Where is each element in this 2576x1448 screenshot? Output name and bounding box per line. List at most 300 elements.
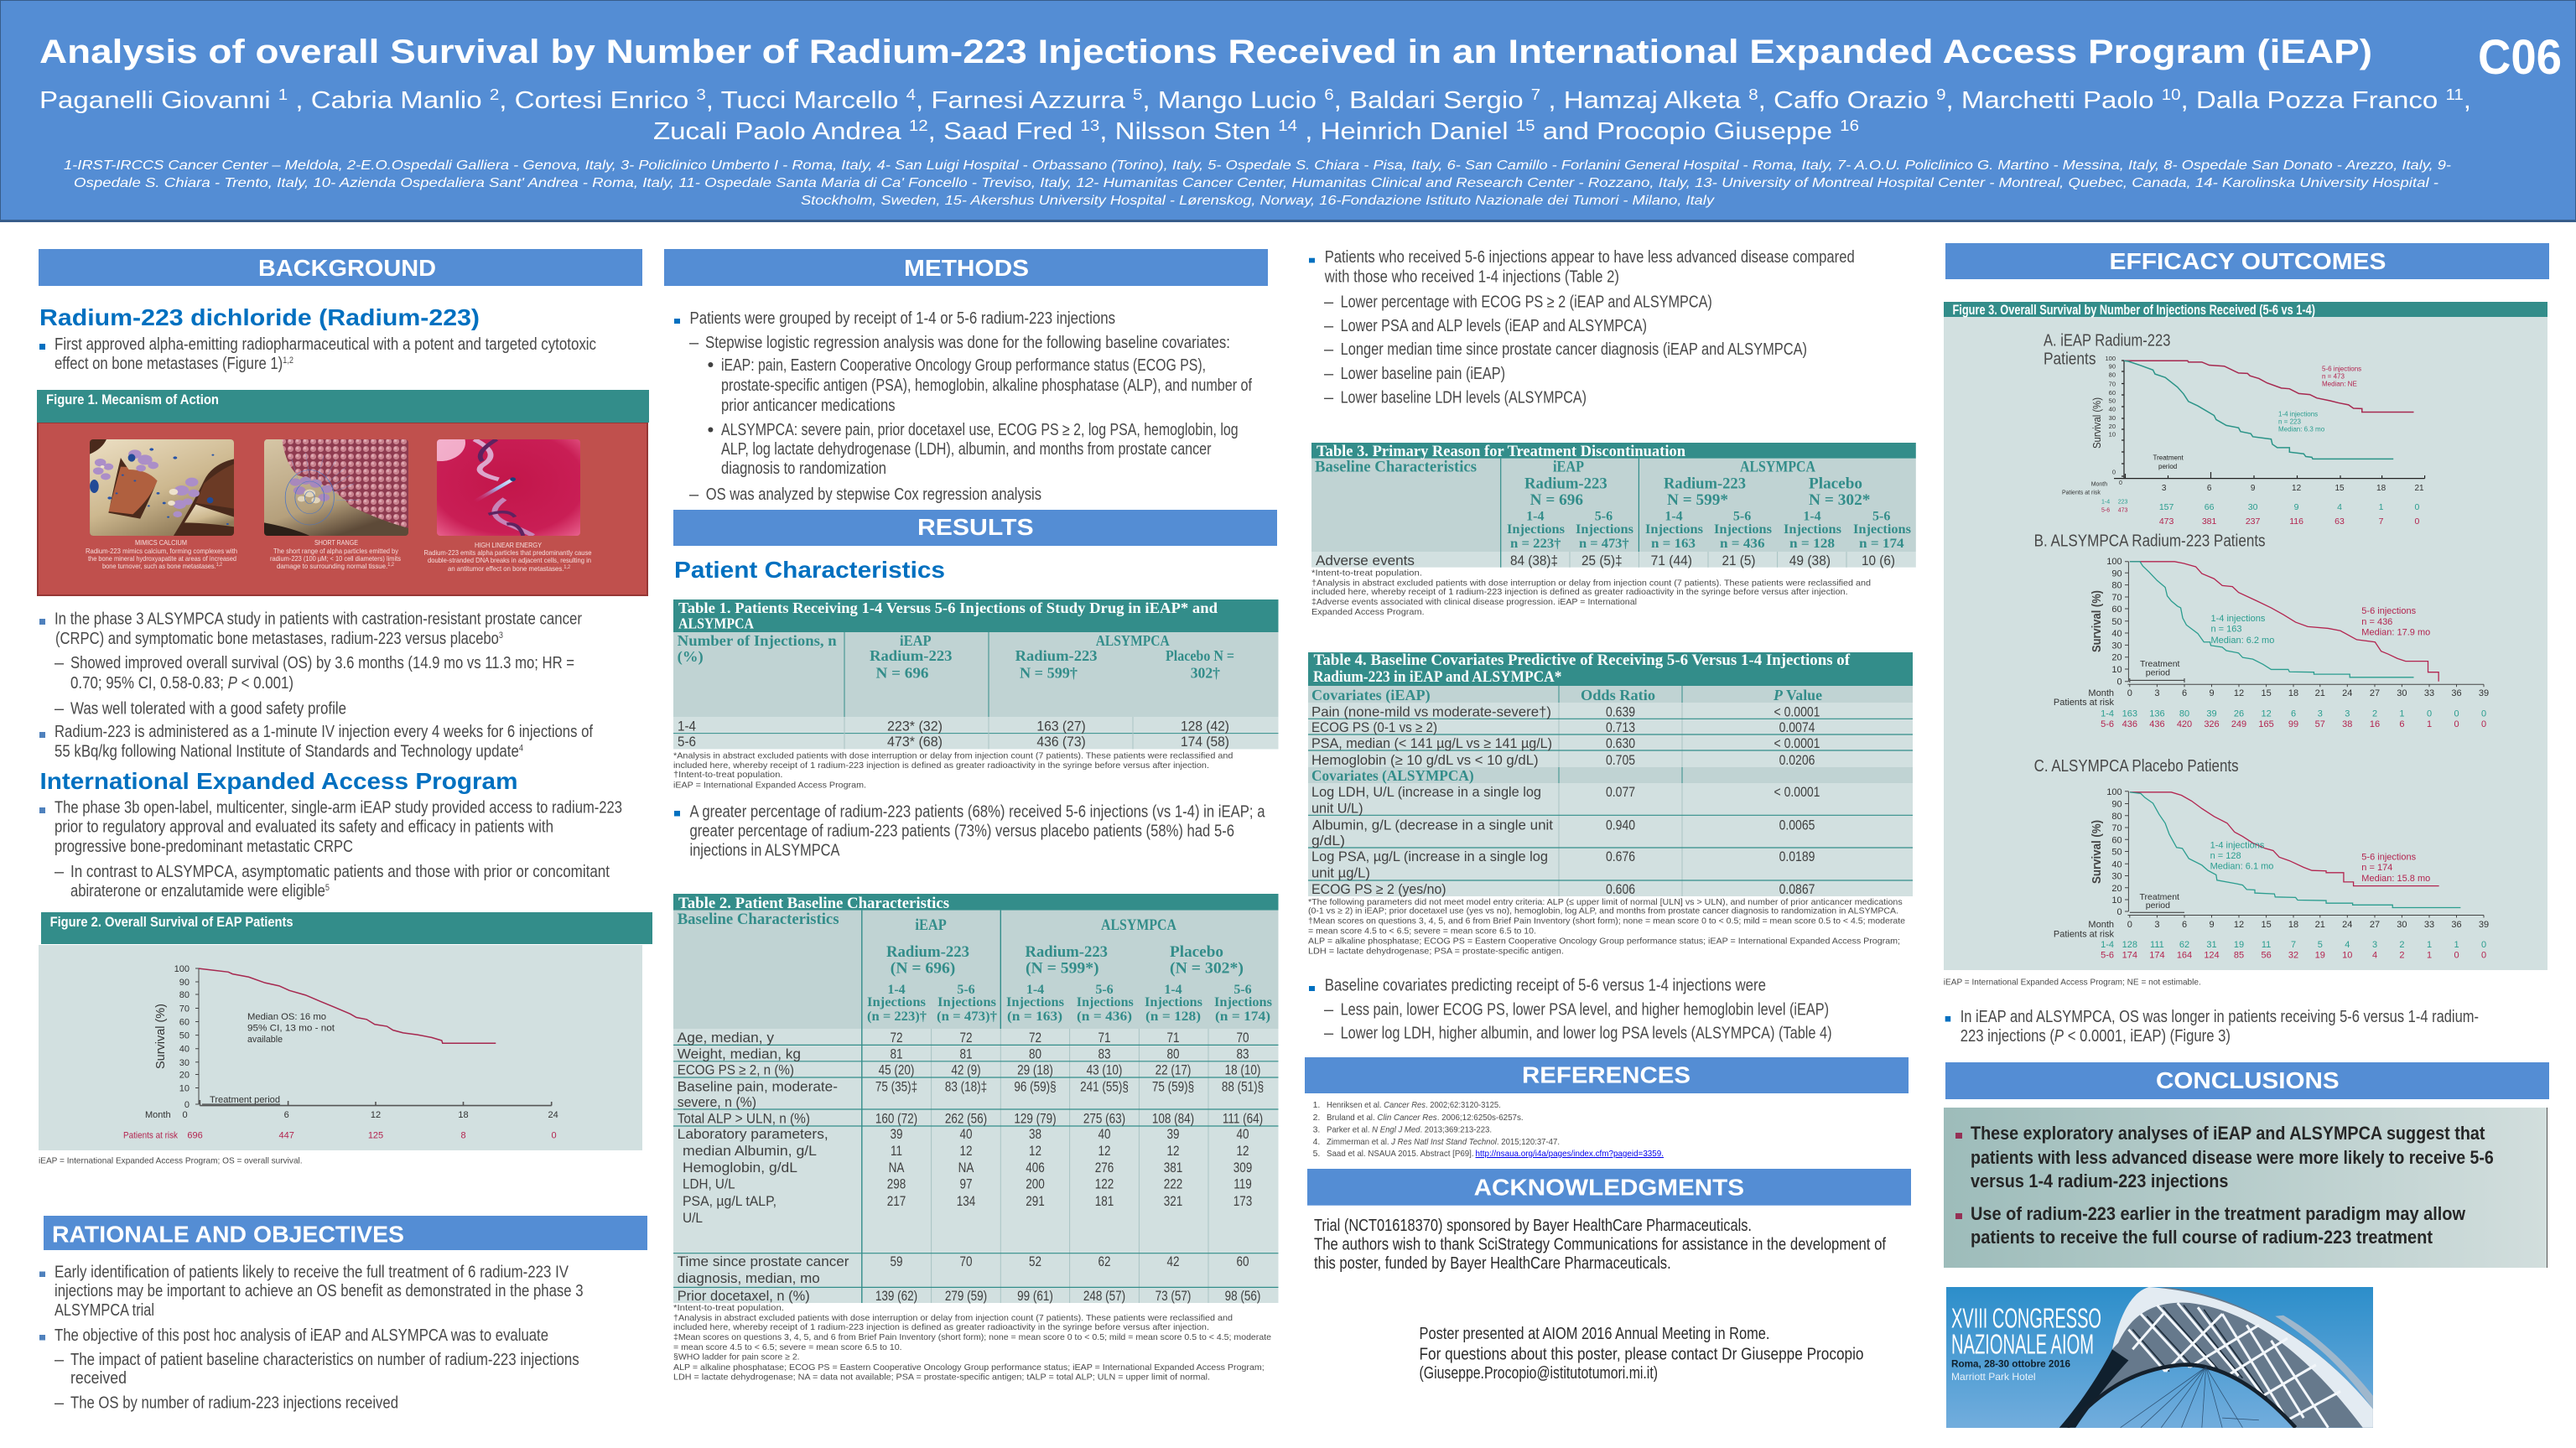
chart B: ALSYMPCA radium-223 patients: Patients at risk [2054,698,2114,708]
table 2: NA [889,1160,905,1176]
table 2: iEAP [915,916,947,934]
table 1: 128 (42) [1181,719,1229,734]
chart B: ALSYMPCA radium-223 patients: 6 [2399,719,2404,729]
subheading: patient characteristics: Patient Characteristics [674,557,945,583]
figure 3: overall survival by number of injections [1944,302,2547,970]
text block: less advanced disease: with those who received 1-4 injections (Table 2) [1324,268,1619,287]
caption: high linear energy: double-stranded DNA breaks in adjacent cells, resulting in [428,556,591,564]
chart B: ALSYMPCA radium-223 patients: 21 [2315,688,2325,698]
header band [0,0,2576,222]
text block: baseline covariates [1309,977,1832,1042]
text block: less advanced disease [1309,248,1855,407]
table 2: (N = 599*) [1026,960,1099,978]
table 2: LDH, U/L [683,1177,735,1192]
table 2: ALSYMPCA [1101,916,1176,934]
table 3: n = 223† [1510,537,1561,551]
heading: efficacy outcomes: EFFICACY OUTCOMES [2110,248,2386,274]
chart B: ALSYMPCA radium-223 patients: 80 [2179,708,2189,719]
table 2 footnotes: ALP = alkaline phosphatase; ECOG PS = Eastern Cooperative Oncology Group performance status; iEAP = International Expanded Access Program; [673,1362,1265,1373]
chart C: ALSYMPCA placebo patients: 10 [2342,951,2352,961]
chart: overall survival curve: 95% CI, 13 mo - not [247,1024,335,1034]
table 1: 436 (73) [1036,734,1086,750]
table 2: diagnosis, median, mo [678,1271,820,1286]
table 1: 473* (68) [887,734,943,750]
chart C: ALSYMPCA placebo patients: 1-4 [2101,940,2114,950]
chart A: iEAP radium-223 patients: 70 [2109,381,2116,387]
chart A: iEAP radium-223 patients: 1 [2379,502,2384,512]
chart B: ALSYMPCA radium-223 patients: 16 [2370,719,2380,729]
chart A: iEAP radium-223 patients: Patients [2044,350,2096,368]
chart B: ALSYMPCA radium-223 patients: 70 [2111,593,2122,603]
table 2: Table 2. Patient Baseline Characteristics [678,895,949,912]
chart A: iEAP radium-223 patients: 15 [2334,484,2345,493]
table 2: (n = 436) [1077,1009,1132,1024]
table 2: 59 [890,1254,903,1269]
image: bone with radium-223 [90,439,234,536]
subheading: iEAP: International Expanded Access Program [40,768,518,794]
table 2: 71 [1166,1030,1180,1046]
chart A: iEAP radium-223 patients: 21 [2414,484,2424,493]
chart A: iEAP radium-223 patients: Patients at risk [2062,490,2101,496]
table 1: Radium-223 [870,647,953,664]
caption: short range: SHORT RANGE [314,538,358,547]
chart: overall survival curve: Month [145,1110,171,1120]
text block: ALSYMPCA results: Was well tolerated with a good safety profile [70,700,346,719]
banner: AIOM congress [1946,1287,2373,1428]
text block: baseline covariates: Less pain, lower ECOG PS, lower PSA level, and higher hemoglobin level (iEAP) [1341,1001,1829,1020]
table 2: 40 [959,1127,973,1142]
heading: rationale [44,1216,647,1250]
table 2: median Albumin, g/L [683,1144,817,1159]
authors: 15 [1516,117,1535,134]
table 2: 38 [1029,1127,1041,1142]
table 1 [673,599,1278,750]
chart A: iEAP radium-223 patients: 80 [2109,371,2116,379]
chart B: ALSYMPCA radium-223 patients: 15 [2261,688,2272,698]
panel: efficacy outcomes [1944,243,2549,1046]
chart A: iEAP radium-223 patients: 5-6 [2101,508,2110,514]
chart A: iEAP radium-223 patients: 237 [2246,516,2261,527]
text block: OS longer: 223 injections (P < 0.0001, iEAP) (Figure 3) [1961,1027,2231,1046]
table 2: 22 (17) [1156,1062,1191,1078]
text block: ALSYMPCA results: 4 [519,743,523,753]
chart C: ALSYMPCA placebo patients: 9 [2209,920,2215,930]
authors: 1 [278,86,288,103]
table 1: Placebo N = [1166,647,1234,664]
chart A: iEAP radium-223 patients: 473 [2118,508,2127,514]
chart B: ALSYMPCA radium-223 patients: 38 [2342,719,2352,729]
table 2: NA [958,1160,974,1176]
table 2: 83 [1236,1046,1249,1062]
chart B: ALSYMPCA radium-223 patients: 6 [2291,708,2296,719]
text block: acknowledgments: this poster, funded by Bayer HealthCare Pharmaceuticals. [1314,1254,1671,1273]
chart B: ALSYMPCA radium-223 patients: 39 [2479,688,2489,698]
chart A: iEAP radium-223 patients: 381 [2202,516,2217,527]
text block: radium-223 description: 1,2 [283,356,293,366]
table 2: 80 [1029,1046,1041,1062]
table 2: 1-4 [1026,983,1044,997]
caption: mimics calcium: bone turnover, such as bone metastases. [102,562,232,570]
text block: rationale: ALSYMPCA trial [55,1301,154,1320]
chart B: ALSYMPCA radium-223 patients: Month [2088,688,2114,698]
chart C: ALSYMPCA placebo patients: 19 [2234,940,2244,950]
chart B: ALSYMPCA radium-223 patients: 18 [2288,688,2298,698]
text block: methods [674,309,1252,504]
affiliations: Stockholm, Sweden, 15- Akershus University Hospital - Lørenskog, Norway, 16-Fondazione Istituto Nazionale dei Tumori - Milano, Italy [801,194,1715,208]
chart B: ALSYMPCA radium-223 patients: 80 [2111,581,2122,591]
chart C: ALSYMPCA placebo patients: Survival (%) [2090,820,2104,884]
image: high linear energy [437,439,580,536]
reference list: Bruland et al. Clin Cancer Res. 2006;12:6250s-6257s. [1327,1113,1524,1123]
heading: rationale: RATIONALE AND OBJECTIVES [52,1222,404,1248]
chart B: ALSYMPCA radium-223 patients: 12 [2234,688,2244,698]
caption: mimics calcium: 1,2 [216,563,223,568]
chart C: ALSYMPCA placebo patients: 33 [2424,920,2434,930]
caption: high linear energy: 1,2 [564,565,571,570]
chart B: ALSYMPCA radium-223 patients: 0 [2427,708,2432,719]
chart A: iEAP radium-223 patients: 3 [2162,484,2167,493]
table 2: 12 [1029,1144,1041,1159]
table 2: 42 [1166,1254,1180,1269]
chart B: ALSYMPCA radium-223 patients: 30 [2397,688,2407,698]
chart B: ALSYMPCA radium-223 patients: 1 [2399,708,2404,719]
table 4: Covariates (iEAP) [1311,687,1431,704]
authors: 2 [490,86,499,103]
chart B: ALSYMPCA radium-223 patients: 1-4 [2101,708,2114,719]
chart: overall survival curve: 30 [179,1058,190,1068]
table 2: 29 (18) [1017,1062,1053,1078]
text block: ALSYMPCA results [39,610,593,761]
conclusions box: These exploratory analyses of iEAP and ALSYMPCA suggest that [1971,1123,2485,1144]
conclusions box: versus 1-4 radium-223 injections [1971,1170,2228,1191]
heading: results: RESULTS [917,514,1034,540]
table 1 footnotes: *Analysis in abstract excluded patients with dose interruption or delay from injection count (7 patients). These patients were reclassified and [673,751,1233,761]
chart C: ALSYMPCA placebo patients: 39 [2479,920,2489,930]
chart A: iEAP radium-223 patients: n = 223 [2278,418,2301,425]
text block: radium-223 description: First approved alpha-emitting radiopharmaceutical with a potent and targeted cytotoxic [55,335,596,354]
table 3: Injections [1714,522,1772,537]
table 2: 298 [887,1176,906,1192]
table 3: Radium-223 [1524,475,1607,492]
chart: overall survival curve: 18 [458,1110,469,1120]
chart C: ALSYMPCA placebo patients: Median: 15.8 mo [2361,874,2430,884]
table 1 footnotes: included here, whereby receipt of 1 radium-223 injection is defined as greater radioactivity in the syringe before versus after injection. [673,760,1209,771]
chart B: ALSYMPCA radium-223 patients: 163 [2122,708,2137,719]
text block: methods: – [689,485,699,504]
table 3: n = 436 [1720,537,1764,551]
table 4: 0.0867 [1779,882,1815,897]
chart C: ALSYMPCA placebo patients: 12 [2234,920,2244,930]
chart C: ALSYMPCA placebo patients: Month [2088,920,2114,930]
text block: ALSYMPCA results: – [55,700,65,719]
chart A: iEAP radium-223 patients: 60 [2109,389,2116,397]
chart A: iEAP radium-223 patients: 116 [2289,516,2303,527]
authors: , Tucci Marcello [706,87,906,114]
text block: baseline covariates: – [1324,1024,1334,1042]
chart A: iEAP radium-223 patients: 223 [2118,499,2127,505]
chart: overall survival curve: 80 [179,990,190,1000]
table 2: 72 [1029,1030,1041,1046]
table 1: ALSYMPCA [678,615,754,632]
table 2: Baseline pain, moderate- [678,1079,838,1094]
table 2: 111 (64) [1223,1111,1263,1127]
table 3: Placebo [1809,475,1862,492]
table 4: < 0.0001 [1774,736,1820,751]
table 3 footnotes: *Intent-to-treat population. [1311,568,1422,579]
text block: greater percentage: greater percentage of radium-223 patients (73%) versus placebo patients (58%) had 5-6 [689,823,1234,841]
table 4: 0.0065 [1779,817,1815,833]
table 1: 223* (32) [887,719,943,734]
table 2 footnotes [673,1303,1271,1383]
chart C: ALSYMPCA placebo patients: 62 [2179,940,2189,950]
chart B: ALSYMPCA radium-223 patients: 57 [2315,719,2325,729]
table 4: Odds Ratio [1581,687,1655,703]
table 2: 42 (9) [951,1062,981,1078]
chart A: iEAP radium-223 patients: period [2158,463,2177,470]
table 3: Table 3. Primary Reason for Treatment Discontinuation [1317,443,1685,460]
table 4: 0.630 [1606,736,1635,751]
text block: iEAP description: 5 [325,883,330,893]
table 2: 99 (61) [1017,1289,1053,1304]
text block: acknowledgments: The authors wish to thank SciStrategy Communications for assistance in the development of [1314,1236,1886,1254]
text block: OS longer: In iEAP and ALSYMPCA, OS was longer in patients receiving 5-6 versus 1-4 radium- [1961,1008,2479,1026]
table 3: ALSYMPCA [1740,459,1815,476]
conclusions box: patients with less advanced disease were more likely to receive 5-6 [1971,1147,2494,1168]
table 3: 1-4 [1526,510,1544,524]
chart: overall survival curve: 696 [187,1131,203,1141]
table 4 footnotes: †Mean scores on questions 3, 4, 5, and 6 from Brief Pain Inventory (short form); none = mean score 0 to < 0.5; mild = mean score 0.5 to < 4.5; moderate [1308,916,1905,926]
chart: overall survival curve: 8 [460,1131,466,1141]
heading: conclusions [1945,1062,2549,1099]
chart B: ALSYMPCA radium-223 patients: 1-4 injections [2210,614,2266,624]
text block: iEAP description: In contrast to ALSYMPCA, asymptomatic patients and those with prior or concomitant [70,863,610,881]
table 2: 81 [959,1046,973,1062]
table 4 footnotes: LDH = lactate dehydrogenase; PSA = prostate-specific antigen. [1308,947,1564,957]
chart C: ALSYMPCA placebo patients: Median: 6.1 mo [2210,862,2273,872]
table 4: P Value [1773,687,1822,703]
chart C: ALSYMPCA placebo patients: 111 [2150,940,2164,950]
table 2: 80 [1166,1046,1180,1062]
table 2: (n = 473)† [937,1009,997,1024]
chart A: iEAP radium-223 patients [2044,332,2425,527]
affiliations: 1-IRST-IRCCS Cancer Center – Meldola, 2-E.O.Ospedali Galliera - Genova, Italy, 3- Policlinico Umberto I - Roma, Italy, 4- San Luigi Hospital - Orbassano (Torino), Italy, 5- Ospedale S. Chiara - Pisa, Italy, 6- San Camillo - Forlanini General Hospital - Roma, Italy, 7- A.O.U. Policlinico G. Martino - Messina, Italy, 8- Ospedale San Donato - Arezzo, Italy, 9- [64,158,2451,173]
reference list: Zimmerman et al. J Res Natl Inst Stand Technol. 2015;120:37-47. [1327,1137,1560,1147]
chart B: ALSYMPCA radium-223 patients: 99 [2288,719,2298,729]
chart B: ALSYMPCA radium-223 patients: 436 [2149,719,2165,729]
table 3: Radium-223 [1664,475,1746,492]
table 1: 302† [1191,665,1220,682]
table 4: 0.0189 [1779,849,1815,864]
table 4: < 0.0001 [1774,785,1820,800]
chart B: ALSYMPCA radium-223 patients: 100 [2106,557,2122,567]
table 3: N = 696 [1530,491,1583,509]
table 1: Radium-223 [1015,647,1098,664]
table 2: 70 [959,1254,973,1269]
chart C: ALSYMPCA placebo patients: 0 [2454,951,2459,961]
text block: methods: prior anticancer medications [721,397,896,415]
chart C: ALSYMPCA placebo patients: 70 [2111,823,2122,833]
chart A: iEAP radium-223 patients: 40 [2109,405,2116,413]
panel: background [37,249,652,1165]
table 2: 321 [1164,1194,1182,1209]
table 2: 62 [1098,1254,1111,1269]
chart C: ALSYMPCA placebo patients: 128 [2122,940,2137,950]
banner text [1951,1303,2101,1383]
text block: less advanced disease: Longer median time since prostate cancer diagnosis (iEAP and ALSYMPCA) [1341,340,1807,359]
chart: overall survival curve: 0 [182,1110,188,1120]
chart A: iEAP radium-223 patients: Month [2091,482,2107,488]
text block: methods: – [689,334,699,352]
caption: high linear energy: Radium-223 emits alpha particles that predominantly cause [424,548,592,557]
table 4: < 0.0001 [1774,704,1820,720]
authors: 9 [1936,86,1946,103]
chart C: ALSYMPCA placebo patients: 4 [2345,940,2350,950]
chart A: iEAP radium-223 patients: 90 [2109,363,2116,371]
caption: short range: damage to surrounding normal tissue. [277,562,397,570]
table 2: 75 (35)‡ [875,1079,917,1095]
heading: background [39,249,642,286]
text block: less advanced disease: – [1324,340,1334,359]
chart: overall survival curve: 12 [371,1110,381,1120]
chart B: ALSYMPCA radium-223 patients: 0 [2454,708,2459,719]
table 2: ECOG PS ≥ 2, n (%) [678,1063,794,1078]
table 4: g/dL) [1311,833,1345,849]
table 2: 75 (59)§ [1152,1079,1194,1095]
text block: baseline covariates: – [1324,1001,1334,1020]
reference list: Henriksen et al. Cancer Res. 2002;62:3120-3125. [1327,1100,1501,1110]
table 2: 72 [959,1030,973,1046]
heading: results [673,510,1277,546]
table 2: 1-4 [887,983,906,997]
table 4: 0.606 [1606,882,1635,897]
chart A: iEAP radium-223 patients: 7 [2379,516,2384,527]
table 4 [1308,651,1913,897]
text block: greater percentage [674,802,1265,860]
chart: overall survival curve: 0 [552,1131,557,1141]
table 2: Injections [937,995,996,1009]
table 2: 248 (57) [1083,1289,1125,1304]
text block: ALSYMPCA results: (CRPC) and symptomatic bone metastases, radium-223 versus placebo [55,630,589,648]
chart A: iEAP radium-223 patients: Median: 6.3 mo [2278,425,2325,433]
chart B: ALSYMPCA radium-223 patients: Median: 6.2 mo [2210,636,2274,646]
table 2 footnotes: = mean score 4.5 to < 6.5; severe = mean score 6.5 to 10. [673,1342,902,1352]
heading: references [1305,1057,1909,1093]
table 1: (%) [678,648,704,666]
table 4: Albumin, g/L (decrease in a single unit [1312,817,1553,833]
text block: less advanced disease: – [1324,365,1334,383]
table 3: 25 (5)‡ [1581,553,1623,568]
authors: 16 [1840,117,1859,134]
heading: acknowledgments: ACKNOWLEDGMENTS [1474,1175,1744,1201]
authors: 7 [1531,86,1540,103]
table 2: Injections [1077,995,1134,1009]
chart: overall survival curve: Survival (%) [153,1004,168,1069]
table 2: (N = 302*) [1170,960,1244,978]
text block: baseline covariates: Lower log LDH, higher albumin, and lower log PSA levels (ALSYMPCA) (Table 4) [1341,1024,1832,1042]
chart B: ALSYMPCA radium-223 patients: 39 [2206,708,2217,719]
table 2: 83 (18)‡ [945,1079,987,1095]
caption: short range [270,538,401,570]
banner text: Marriott Park Hotel [1951,1371,2036,1383]
table 4 footnotes [1308,897,1905,957]
figure 1: mechanism of action: Figure 1. Mecanism of Action [46,392,219,407]
chart A: iEAP radium-223 patients: 30 [2109,414,2116,422]
table 4: Radium-223 in iEAP and ALSYMPCA* [1313,668,1561,686]
table 4: 0.713 [1606,720,1635,735]
chart: overall survival curve: 24 [548,1110,558,1120]
chart: overall survival curve: Treatment period [210,1095,280,1105]
table 2: 70 [1236,1030,1249,1046]
table 2: Time since prostate cancer [678,1254,849,1269]
chart C: ALSYMPCA placebo patients: 36 [2451,920,2462,930]
chart C: ALSYMPCA placebo patients: 6 [2182,920,2187,930]
text block: iEAP description: progressive bone-predominant metastatic CRPC [55,838,353,856]
chart C: ALSYMPCA placebo patients: 85 [2234,951,2244,961]
authors: 13 [1080,117,1099,134]
chart C: ALSYMPCA placebo patients: 15 [2261,920,2272,930]
authors: , Saad Fred [928,118,1080,145]
table 3: n = 473† [1579,537,1629,551]
heading: methods [664,249,1268,286]
table 3 footnotes: †Analysis in abstract excluded patients with dose interruption or delay from injection count (7 patients). These patients were reclassified and [1311,579,1871,589]
table 2 footnotes: §WHO ladder for pain score ≥ 2. [673,1352,800,1362]
text block: radium-223 description: effect on bone metastases (Figure 1) [55,355,328,373]
authors: , Dalla Pozza Franco [2181,87,2446,114]
table 2: 5-6 [957,983,975,997]
text block: rationale [39,1263,584,1412]
footnote: iEAP = International Expanded Access Program; OS = overall survival. [39,1155,303,1165]
table 4: 0.705 [1606,753,1635,768]
text block: less advanced disease: – [1324,389,1334,407]
chart A: iEAP radium-223 patients: 12 [2292,484,2302,493]
chart C: ALSYMPCA placebo patients: 0 [2481,951,2486,961]
table 4: 0.940 [1606,817,1635,833]
table 2: 83 [1098,1046,1111,1062]
table 1 footnotes [673,751,1233,790]
caption: high linear energy: HIGH LINEAR ENERGY [475,541,542,549]
text block: ALSYMPCA results: 3 [499,631,503,641]
table 2: Laboratory parameters, [678,1127,828,1142]
table 1 footnotes: †Intent-to-treat population. [673,770,783,780]
table 4: Pain (none-mild vs moderate-severe†) [1311,704,1551,719]
chart A: iEAP radium-223 patients: 0 [2414,516,2419,527]
chart B: ALSYMPCA radium-223 patients: 50 [2111,617,2122,627]
text block: methods: prostate-specific antigen (PSA), hemoglobin, alkaline phosphatase (ALP), and number of [721,376,1252,395]
chart B: ALSYMPCA radium-223 patients: 1 [2427,719,2432,729]
chart A: iEAP radium-223 patients: A. iEAP Radium-223 [2044,332,2170,350]
table 2: 52 [1029,1254,1041,1269]
figure 2: overall survival of EAP patients: Figure 2. Overall Survival of EAP Patients [50,914,293,930]
chart A: iEAP radium-223 patients: 1-4 [2101,499,2110,505]
chart B: ALSYMPCA radium-223 patients: 27 [2370,688,2380,698]
heading: acknowledgments [1307,1169,1911,1206]
chart: overall survival curve: 60 [179,1018,190,1028]
table 3: Injections [1853,522,1911,537]
authors: , Heinrich Daniel [1297,118,1516,145]
text block: iEAP description: abiraterone or enzalutamide were eligible [70,882,377,900]
text block: less advanced disease: Lower baseline pain (iEAP) [1341,365,1505,383]
image: short range [264,439,408,536]
table 2: 12 [1098,1144,1111,1159]
caption: high linear energy [424,541,592,573]
table 2: 43 (10) [1087,1062,1122,1078]
text block: less advanced disease: Lower PSA and ALP levels (iEAP and ALSYMPCA) [1341,317,1647,335]
chart C: ALSYMPCA placebo patients [2034,757,2489,961]
caption: short range: 1,2 [387,563,395,568]
table 3 footnotes: included here, whereby receipt of 1 radium-223 injection is defined as greater radioactivity in the syringe before versus after injection. [1311,587,1848,597]
chart A: iEAP radium-223 patients: Survival (%) [2090,397,2103,449]
chart A: iEAP radium-223 patients: 30 [2248,502,2258,512]
